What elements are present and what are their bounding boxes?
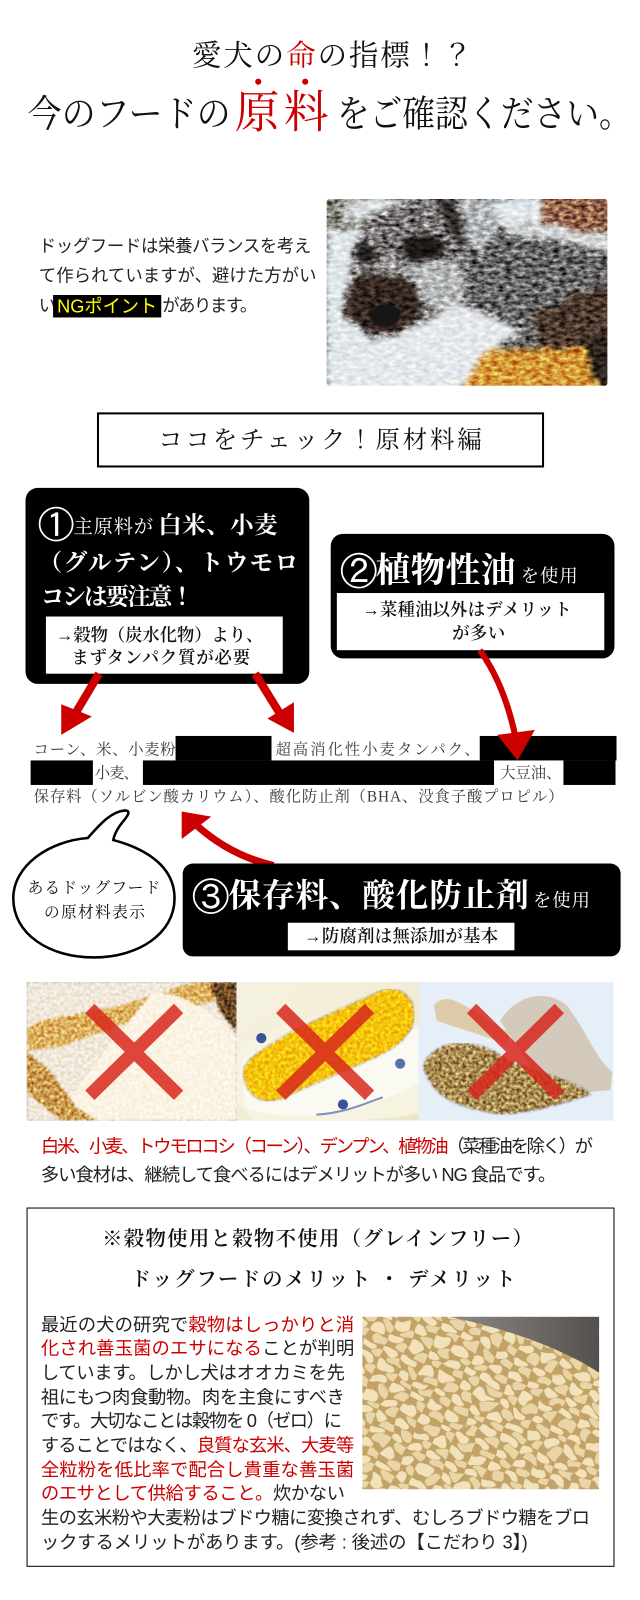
panel body text: 祖にもつ肉食動物。肉を主食にすべき (41, 1387, 345, 1408)
ingredient list with redaction bars: 小麦、 (95, 765, 139, 782)
intro text: ドッグフードは栄養バランスを考え (39, 236, 311, 256)
arrow: panel 2 to soybean oil (480, 650, 535, 760)
intro text: い (39, 295, 56, 315)
panel body text: 生の玄米粉や大麦粉はブドウ糖に変換されず、むしろブドウ糖をブロ (41, 1507, 590, 1528)
speech bubble: の原材料表示 (44, 904, 145, 922)
food caption: 白米、小麦、トウモロコシ（コーン）、デンプン、植物油（菜種油を除く）が (41, 1135, 593, 1156)
heading box: check raw materials (98, 413, 543, 466)
panel 1: grains (26, 488, 309, 684)
panel 1 note (46, 617, 283, 674)
title line 2 left: 今のフードの (28, 94, 231, 135)
panel body text: しています。しかし犬はオオカミを先 (41, 1362, 345, 1383)
intro text (39, 236, 316, 317)
heading box: check raw materials: ココをチェック！原材料編 (158, 426, 482, 454)
title (28, 39, 632, 138)
speech bubble (13, 810, 175, 957)
panel 2 heading: を使用 (521, 566, 578, 586)
panel 2: vegetable oil (331, 534, 614, 658)
panel 3 heading: を使用 (533, 890, 590, 910)
photo: white rice (27, 982, 237, 1121)
panel body text: のエサとして供給すること。炊かない (41, 1482, 345, 1503)
panel 2 note: が多い (452, 624, 505, 643)
red x marks (90, 1008, 559, 1095)
ingredient list with redaction bars: 大豆油、 (500, 765, 561, 782)
panel 1 heading: （グルテン）、トウモロ (39, 550, 298, 577)
intro text: て作られていますが、避けた方がい (39, 266, 316, 286)
x mark 1 (90, 1008, 179, 1095)
panel 2 heading: ② (340, 552, 378, 590)
ingredient list with redaction bars: コーン、米、小麦粉 (34, 741, 176, 758)
food caption (41, 1135, 593, 1185)
panel body text: することではなく、良質な玄米、大麦等 (41, 1434, 354, 1455)
ingredient list with redaction bars (31, 736, 617, 805)
panel body text (41, 1314, 590, 1552)
ingredient list with redaction bars: 保存料（ソルビン酸カリウム）、酸化防止剤（BHA、没食子酸プロピル） (34, 787, 563, 805)
panel 1 heading: コシは要注意！ (41, 583, 194, 610)
panel 3 heading: 保存料、酸化防止剤 (229, 877, 529, 914)
title emphasis words with dots: 原料 (235, 88, 329, 138)
food caption: 多い食材は、継続して食べるにはデメリットが多い NG 食品です。 (41, 1164, 556, 1185)
ingredient list with redaction bars: 超高消化性小麦タンパク、 (276, 740, 480, 758)
redaction bars (31, 736, 617, 785)
panel 2 note: →菜種油以外はデメリット (362, 601, 572, 620)
panel body text: 全粒粉を低比率で配合し貴重な善玉菌 (41, 1459, 354, 1480)
corn cob (243, 989, 414, 1101)
panel 1 heading: ① (38, 506, 75, 543)
arrow: panel 3 to preservatives (182, 811, 274, 866)
arrow: panel 1 to wheat protein (255, 674, 294, 733)
panel 2 note (337, 593, 604, 650)
title line 1: 愛犬の命の指標！？ (192, 39, 473, 72)
panel body text: 最近の犬の研究で穀物はしっかりと消 (41, 1314, 354, 1335)
panel heading: ※穀物使用と穀物不使用（グレインフリー） (102, 1227, 533, 1250)
x mark 3 (472, 1008, 559, 1095)
photo: dog (326, 199, 608, 386)
panel 3 note (288, 923, 514, 950)
panel 1 note: →穀物（炭水化物）より、 (56, 626, 263, 645)
intro text: があります。 (162, 295, 257, 315)
panel body text: です。大切なことは穀物を 0（ゼロ）に (41, 1410, 342, 1431)
panel 1 note: まずタンパク質が必要 (71, 648, 251, 667)
speech bubble: あるドッグフード (28, 879, 160, 897)
panel body text: ックするメリットがあります。(参考 : 後述の【こだわり 3】) (41, 1531, 528, 1552)
photo: wheat and flour (419, 982, 613, 1121)
panel 2 heading (340, 551, 578, 590)
photo: corn (237, 982, 421, 1122)
panel 3: preservatives (183, 864, 621, 956)
panel 1 heading (38, 506, 298, 610)
panel 1 heading: 主原料が (73, 516, 153, 538)
panel: grain vs grain-free (27, 1208, 614, 1566)
photo: brown rice (362, 1316, 600, 1490)
x mark 2 (281, 1008, 370, 1095)
panel 2 heading: 植物性油 (376, 551, 515, 590)
panel heading (102, 1227, 533, 1291)
NG point highlight: NGポイント (57, 295, 157, 316)
panel 3 note: →防腐剤は無添加が基本 (304, 926, 498, 946)
arrow: panel 1 to corn (61, 674, 99, 735)
panel body text: 化され善玉菌のエサになることが判明 (41, 1338, 354, 1359)
panel 3 heading: ③ (192, 877, 230, 915)
panel heading: ドッグフードのメリット ・ デメリット (131, 1268, 515, 1291)
panel 1 heading: 白米、小麦 (158, 512, 278, 539)
